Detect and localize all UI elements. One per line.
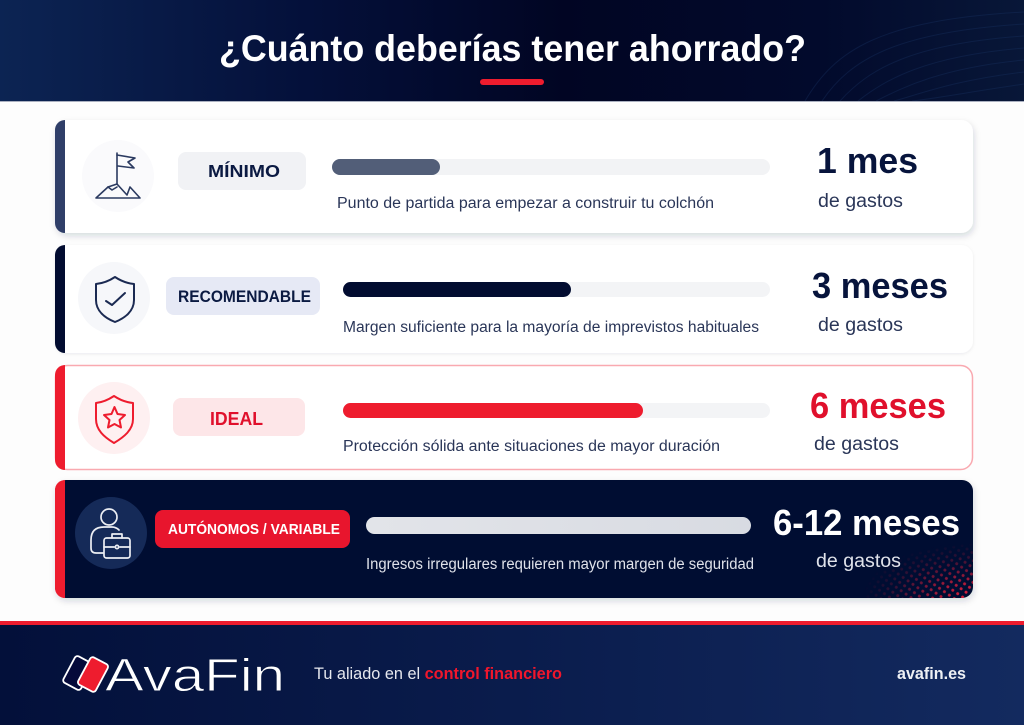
website: avafin.es <box>897 665 966 683</box>
label: recomendable: RECOMENDABLE <box>178 288 311 306</box>
accent bar: mínimo <box>55 120 65 233</box>
wordmark: AvaFin <box>105 649 285 701</box>
title: ¿Cuánto deberías tener ahorrado? <box>219 28 806 69</box>
progress bar: 1 mes <box>332 159 770 175</box>
label: autónomos / variable <box>155 510 350 548</box>
label: mínimo <box>178 152 306 190</box>
caption: de gastos: de gastos <box>818 191 903 212</box>
label: mínimo: MÍNIMO <box>208 160 280 181</box>
accent bar: recomendable <box>55 245 65 353</box>
accent bar: ideal <box>55 365 65 470</box>
progress bar: 6-12 meses <box>366 517 751 534</box>
label: ideal <box>173 398 305 436</box>
value: 1 mes: 1 mes <box>817 140 918 181</box>
logo: AvaFin <box>62 649 285 701</box>
description: recomendable: Margen suficiente para la mayoría de imprevistos habituales <box>343 319 759 336</box>
panel: recomendable <box>55 245 973 353</box>
progress bar: 6 meses <box>343 403 770 418</box>
icon: person with briefcase <box>75 497 147 569</box>
label: recomendable <box>166 277 320 315</box>
label: ideal: IDEAL <box>210 409 263 429</box>
tagline: Tu aliado en el control financiero <box>314 665 562 683</box>
caption: de gastos: de gastos <box>818 315 903 336</box>
value: 6-12 meses: 6-12 meses <box>773 502 960 543</box>
icon: flag on mountain <box>82 140 154 212</box>
accent bar: autónomos <box>55 480 65 598</box>
icon: shield check <box>78 262 150 334</box>
halftone corner <box>868 546 973 598</box>
description: autónomos: Ingresos irregulares requieren mayor margen de seguridad <box>366 556 754 573</box>
label: autónomos / variable: AUTÓNOMOS / VARIABLE <box>168 520 340 538</box>
footer band <box>0 621 1024 725</box>
progress bar: 3 meses <box>343 282 770 297</box>
panel: ideal <box>55 365 972 470</box>
icon: logo cards <box>62 655 109 693</box>
header band <box>0 0 1024 102</box>
description: mínimo: Punto de partida para empezar a construir tu colchón <box>337 195 714 212</box>
panel: mínimo <box>55 120 973 233</box>
caption: de gastos: de gastos <box>814 434 899 455</box>
title underline accent <box>480 79 544 85</box>
value: 3 meses: 3 meses <box>812 265 948 306</box>
value: 6 meses: 6 meses <box>810 385 946 426</box>
icon: shield star <box>78 382 150 454</box>
panel: autónomos / variable <box>55 480 974 599</box>
caption: de gastos: de gastos <box>816 551 901 572</box>
description: ideal: Protección sólida ante situaciones de mayor duración <box>343 438 720 455</box>
